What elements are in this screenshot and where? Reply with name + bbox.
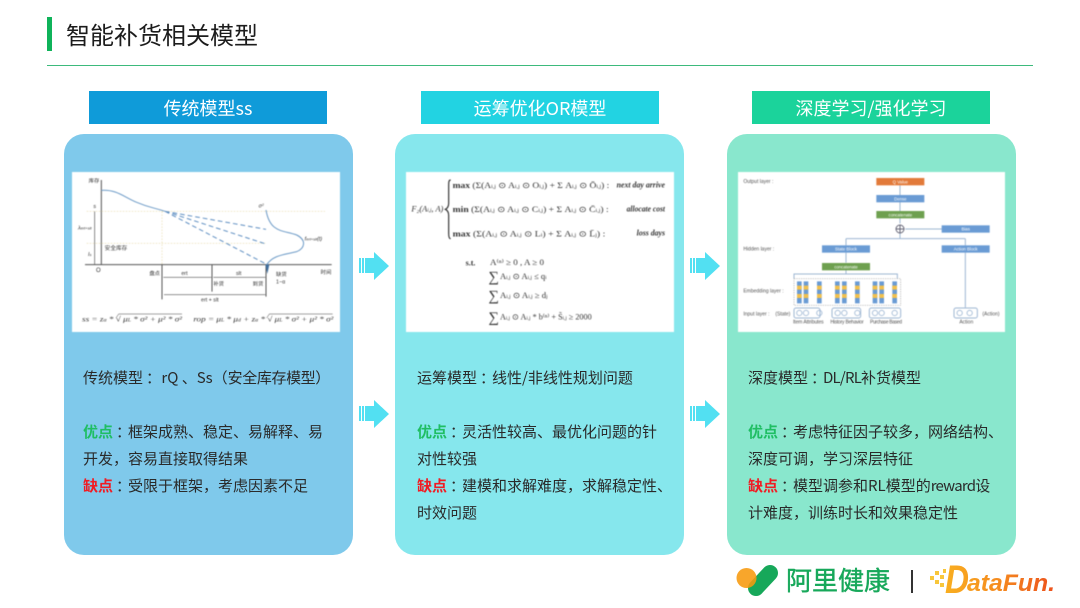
text: operations research description <box>417 367 672 523</box>
chart: inventory curve: s <box>93 204 96 210</box>
chart: inventory curve: 时间 <box>321 268 331 276</box>
figure: optimisation formulas: min (Σ(Ai,j ⊙ Ai,j ⊙ Ci,j) + Σ A i,j ⊙ C̄i,j) : <box>453 205 609 214</box>
chart: inventory curve: 到货 <box>253 279 264 287</box>
heading: operations research model <box>421 91 659 124</box>
logo: DataFun: ataFun. <box>967 570 1055 597</box>
text: traditional model description: 缺点：受限于框架，考虑因素不足 <box>83 475 308 496</box>
text: operations research description: 缺点：建模和求解难度，求解稳定性、 <box>417 475 672 496</box>
text: traditional model description: 优点：框架成熟、稳定、易解释、易 <box>83 421 323 442</box>
chart: inventory curve: O <box>96 268 101 274</box>
text: operations research description: 运筹模型：线性/非线性规划问题 <box>417 367 633 388</box>
text: deep learning description: 深度可调，学习深层特征 <box>748 448 913 469</box>
chart: inventory curve: ss = z α * √ μ L * σ² + μ² * σ² <box>82 315 183 324</box>
diagram: neural network: Q Value <box>893 179 909 184</box>
diagram: neural network: Purchase Based <box>870 320 902 326</box>
title: 智能补货相关模型 <box>66 16 258 51</box>
chart: inventory curve: σ² <box>259 203 264 209</box>
diagram: neural network: Bias <box>961 227 970 232</box>
arrow: top right <box>690 252 720 280</box>
chart: inventory curve <box>72 172 340 332</box>
diagram: neural network: Action Block <box>954 247 978 252</box>
chart: inventory curve: 库存 <box>89 177 100 185</box>
figure: optimisation formulas: s.t. <box>466 259 475 268</box>
title accent bar <box>47 17 52 51</box>
diagram: neural network: concatenate <box>834 264 858 269</box>
diagram: neural network: (State) <box>775 312 791 318</box>
arrow: bottom left <box>359 400 389 428</box>
chart: inventory curve: Is <box>88 252 91 258</box>
text: traditional model description: 传统模型： rQ 、Ss（安全库存模型） <box>83 367 330 388</box>
diagram: neural network: Dense <box>894 196 907 201</box>
text: deep learning description: 计难度，训练时长和效果稳定性 <box>748 502 958 523</box>
chart: inventory curve: slt <box>236 271 242 277</box>
panel: operations research model <box>395 134 684 555</box>
figure: optimisation formulas: F₂(Ai,j, A) <box>410 204 444 213</box>
figure: optimisation formulas <box>406 172 674 332</box>
heading: traditional model <box>89 91 327 124</box>
chart: inventory curve: 盘点 <box>149 269 161 277</box>
chart: inventory curve: ert <box>181 271 188 277</box>
figure: optimisation formulas: ∑ <box>488 310 499 326</box>
figure: optimisation formulas: Ai,j ⊙ Ai,j ≥ dj <box>500 291 548 300</box>
diagram: neural network: History Behavior <box>830 320 864 326</box>
logo: DataFun <box>930 560 1055 598</box>
figure: optimisation formulas: loss days <box>637 229 665 238</box>
diagram: neural network: State Block <box>835 247 858 252</box>
arrow: top left <box>359 252 389 280</box>
chart: inventory curve: λert+slt <box>77 225 93 231</box>
panel: deep learning <box>727 134 1016 555</box>
chart: inventory curve: 缺货 <box>276 270 287 278</box>
text: traditional model description: 开发，容易直接取得结果 <box>83 448 248 469</box>
text: deep learning description: 深度模型：DL/RL补货模型 <box>748 367 921 388</box>
diagram: neural network: concatenate <box>889 212 913 217</box>
text: deep learning description: 优点：考虑特征因子较多，网络结构、 <box>748 421 1003 442</box>
panel: traditional model <box>64 134 353 555</box>
arrow: bottom right <box>690 400 720 428</box>
diagram: neural network: Output layer : <box>743 179 773 185</box>
diagram: neural network: Hidden layer : <box>743 247 774 253</box>
diagram: neural network: Item Attributes <box>793 320 824 326</box>
chart: inventory curve: fert+slt(t) <box>305 237 322 243</box>
text: traditional model description <box>83 367 330 496</box>
icon: Ali Health mark <box>736 565 778 596</box>
heading: operations research model: 运筹优化OR模型 <box>474 95 606 121</box>
text: operations research description: 优点：灵活性较高、最优化问题的针 <box>417 421 657 442</box>
diagram: neural network: (Action) <box>982 312 1000 318</box>
figure: optimisation formulas: max (Σ(A i,j ⊙ Ai,j ⊙ Li) + Σ A i,j ⊙ L̄j) : <box>453 229 605 238</box>
text: operations research description: 时效问题 <box>417 502 477 523</box>
chart: inventory curve: ert + slt <box>201 297 219 303</box>
figure: optimisation formulas: Ai,j ⊙ Ai,j * b⁽ⁿ⁾ + S̃i,j ≥ 2000 <box>500 312 592 321</box>
logo text: 阿里健康 <box>786 561 890 598</box>
diagram: neural network <box>738 172 1005 332</box>
embedding bars <box>797 281 897 303</box>
heading: traditional model: 传统模型ss <box>164 95 252 121</box>
text: operations research description: 对性较强 <box>417 448 477 469</box>
figure: optimisation formulas: A⁽ⁿ⁾ ≥ 0 , A ≥ 0 <box>490 258 544 267</box>
figure: optimisation formulas: allocate cost <box>627 204 666 213</box>
chart: inventory curve: 补货 <box>213 279 225 287</box>
logo: Ali Health <box>736 561 890 598</box>
figure: optimisation formulas: next day arrive <box>617 180 665 189</box>
diagram: neural network: Embedding layer : <box>743 288 784 294</box>
chart: inventory curve: 1−α <box>276 279 285 285</box>
figure: optimisation formulas: ∑ <box>488 270 499 286</box>
chart: inventory curve: 安全库存 <box>105 244 128 252</box>
figure: optimisation formulas: max (Σ(Ai,j ⊙ Ai,j ⊙ Oi,j) + Σ A i,j ⊙ Ōi,j) : <box>453 181 609 190</box>
text: deep learning description: 缺点：模型调参和RL模型的reward设 <box>748 475 990 496</box>
text: deep learning description <box>748 367 1003 523</box>
heading: deep learning: 深度学习/强化学习 <box>795 95 947 121</box>
diagram: neural network: Action <box>959 320 973 326</box>
diagram: neural network: Input layer : <box>743 312 769 318</box>
chart: inventory curve: rop = μ L * μd + zα * √ μ L * σ² + μ² * σ² <box>193 315 334 324</box>
figure: optimisation formulas: ∑ <box>488 289 499 305</box>
figure: optimisation formulas: Ai,j ⊙ Ai,j ≤ qi <box>500 272 547 281</box>
heading: deep learning <box>752 91 990 124</box>
